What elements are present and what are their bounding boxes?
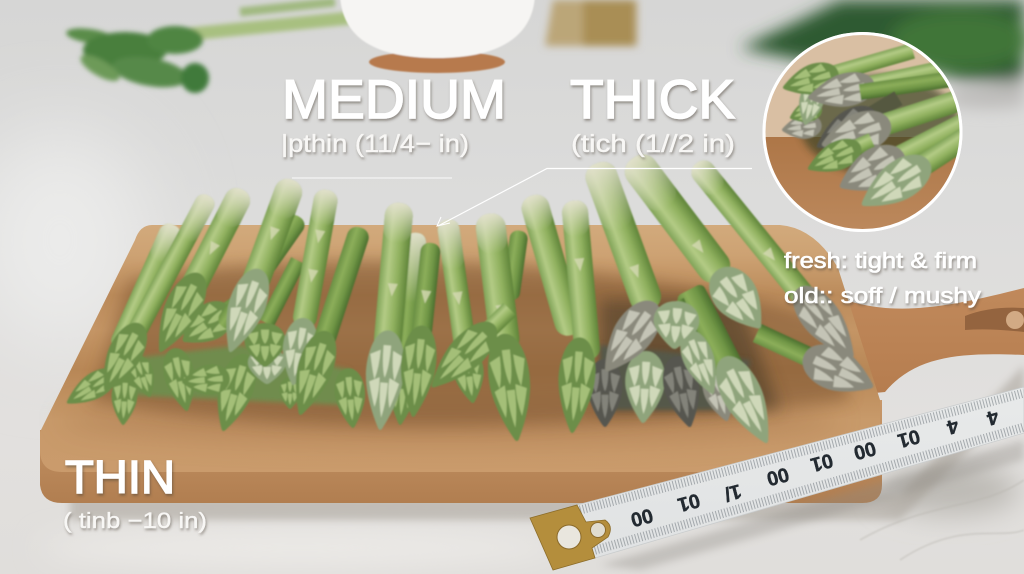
- asparagus spears: [60, 145, 882, 452]
- inset photo: close-up of fresh spears: [760, 30, 982, 237]
- freshness notes: [784, 248, 981, 308]
- label: thin: THIN: [65, 451, 175, 503]
- packed tips filler: [118, 345, 350, 405]
- tape numbers: 4: [944, 414, 961, 438]
- measuring tape: [530, 387, 1024, 570]
- herbs left: [65, 2, 350, 93]
- label: medium: [281, 68, 506, 158]
- tape numbers: 00: [628, 504, 655, 531]
- tape numbers: [628, 405, 1001, 531]
- tape numbers: 01: [895, 425, 922, 452]
- label: thin: ( tinb −10 in): [63, 508, 207, 533]
- main spears right group: [519, 145, 882, 452]
- tape numbers: 00: [764, 463, 791, 490]
- label: medium: MEDIUM: [282, 68, 506, 130]
- tape ticks: [580, 393, 1024, 551]
- freshness notes: fresh: tight & firm: [784, 248, 977, 273]
- cutting board: [40, 225, 1024, 503]
- tape numbers: 1/: [721, 479, 744, 505]
- top surface: [40, 225, 880, 472]
- label: thick: (tich (1//2 in): [571, 130, 735, 158]
- board shadow: [70, 365, 1024, 520]
- tape body: [577, 387, 1024, 558]
- label: medium: |pthin (11/4− in): [281, 130, 469, 158]
- front face: [40, 400, 882, 503]
- tape numbers: 4: [984, 405, 1001, 429]
- arrow head: [437, 217, 450, 226]
- callout lines: [292, 168, 752, 226]
- blurred background props: [65, 0, 1024, 108]
- tape numbers: 01: [675, 489, 702, 516]
- tape shadow: [600, 440, 1024, 570]
- label: thick: [570, 68, 735, 158]
- freshness notes: old:: soff / mushy: [784, 283, 981, 308]
- main spears left group: [90, 174, 537, 444]
- label: thin: [63, 451, 207, 533]
- tape numbers: 01: [808, 449, 835, 476]
- herbs right: [740, 0, 1024, 108]
- white bowl: [340, 0, 535, 73]
- brass end tab: [530, 505, 610, 570]
- tape numbers: 00: [851, 437, 878, 464]
- handle: [800, 288, 1024, 400]
- back small spears: [60, 345, 742, 436]
- label: thick: THICK: [570, 68, 735, 130]
- gold container: [545, 0, 637, 46]
